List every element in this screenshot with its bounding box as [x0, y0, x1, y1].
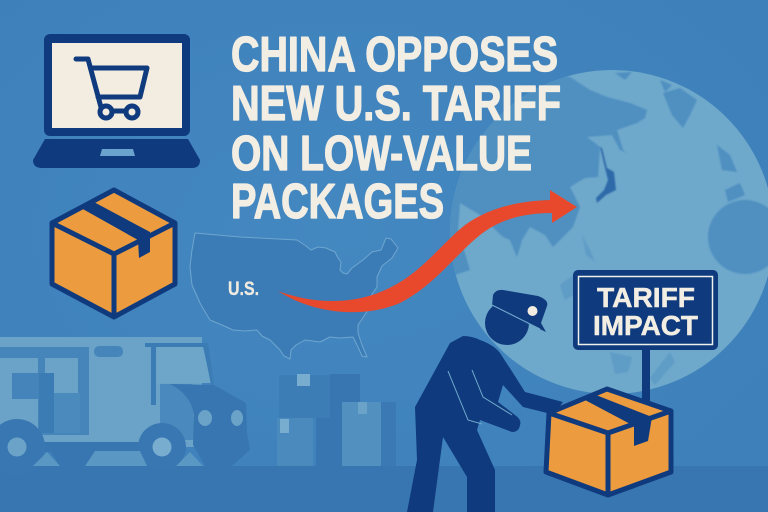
worker body [407, 336, 563, 512]
title: NEW U.S. TARIFF [231, 77, 561, 131]
worker head [485, 301, 529, 345]
label: U.S.: U.S. [228, 279, 259, 300]
japan [596, 147, 616, 203]
globe land: right [717, 145, 745, 202]
globe land: Asia [450, 76, 647, 275]
sign: tariff impact [573, 270, 718, 405]
arrow: trade route [278, 190, 577, 312]
delivery worker [407, 290, 563, 512]
globe [440, 60, 768, 394]
title [231, 28, 561, 229]
map: United States outline [190, 233, 398, 359]
title: ON LOW-VALUE [231, 127, 532, 181]
worker cap [492, 290, 547, 332]
globe land: southern [560, 238, 674, 384]
ground band [0, 466, 768, 512]
delivery truck [0, 337, 250, 475]
title: PACKAGES [231, 175, 444, 229]
icon: laptop with shopping cart [33, 34, 200, 168]
sign: tariff impact: TARIFF [597, 282, 695, 313]
sign: tariff impact: IMPACT [593, 310, 698, 341]
globe land: upper islands [615, 72, 697, 128]
background parcels [277, 374, 396, 466]
title: CHINA OPPOSES [231, 28, 558, 82]
icon: cardboard box with sign [546, 389, 671, 495]
icon: cardboard box [52, 190, 175, 317]
